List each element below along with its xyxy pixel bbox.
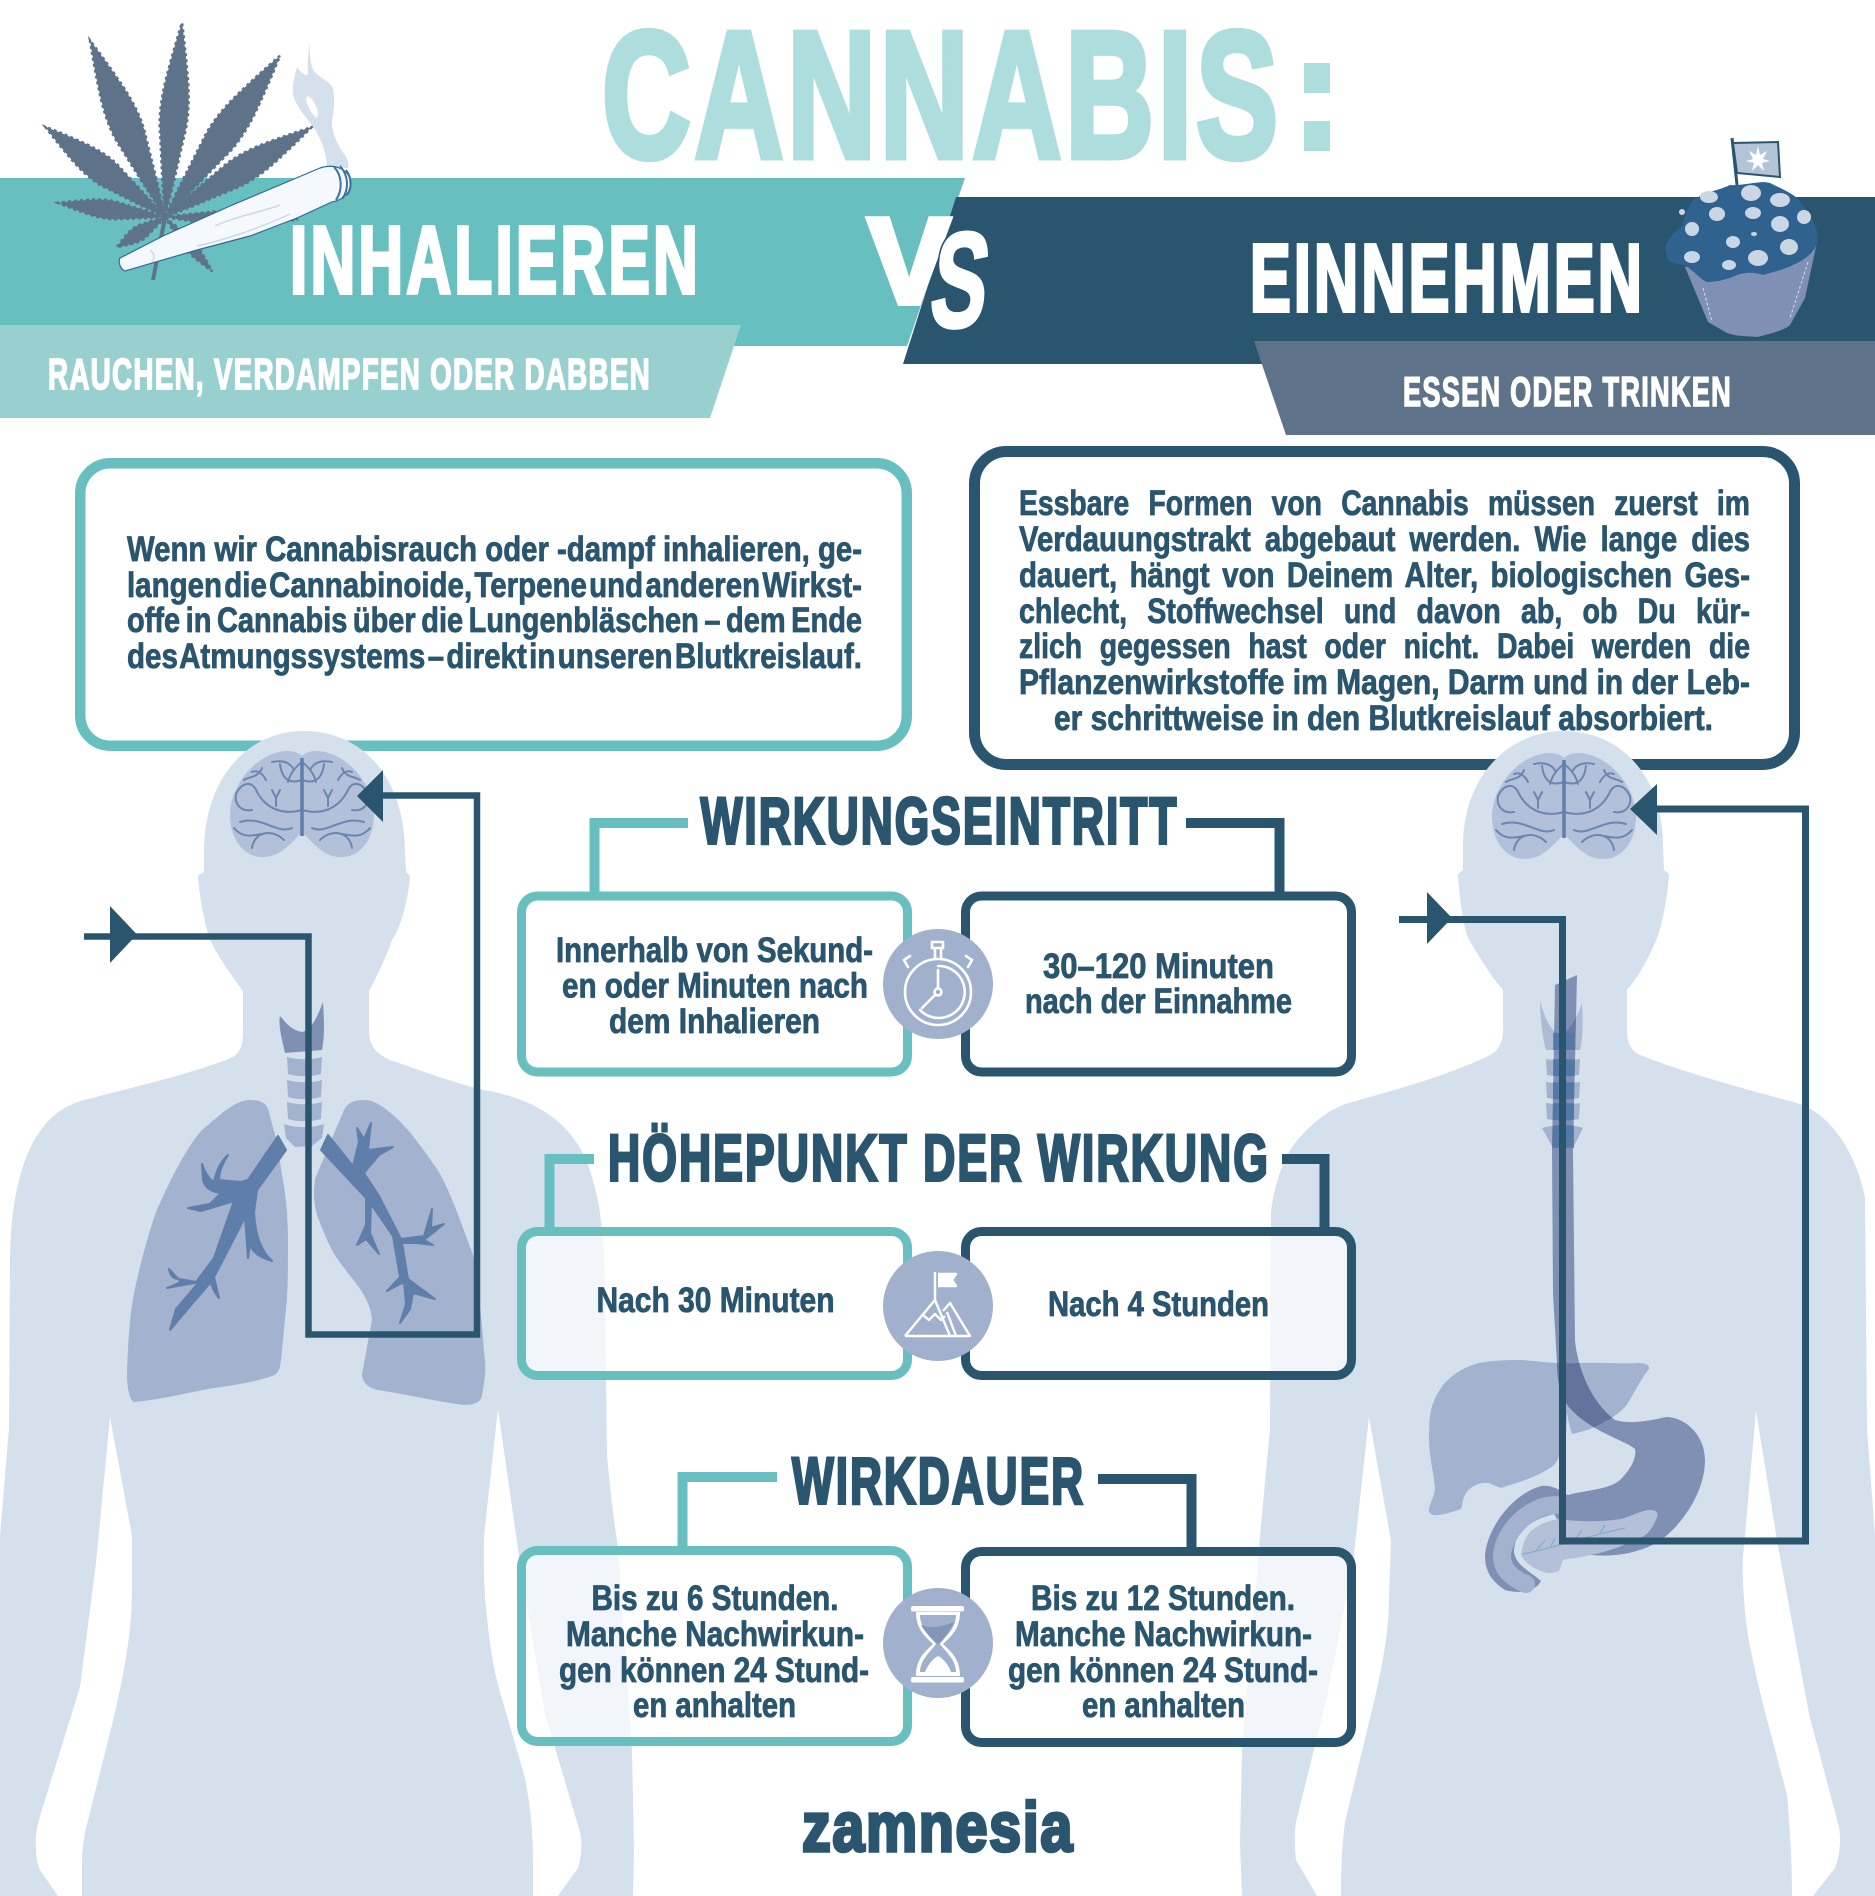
icon: muffin [1665, 138, 1817, 337]
versus label: V [868, 193, 950, 329]
panel: höhepunkt inhalieren [522, 1232, 908, 1376]
arrow: left figure to lungs and brain [84, 770, 477, 1334]
panel: höhepunkt einnehmen: Nach 4 Stunden [1048, 1285, 1269, 1324]
icon: smoke [293, 43, 348, 168]
heading: wirkungseintritt [594, 784, 1280, 896]
versus label: S [923, 203, 998, 356]
text: einnehmen description: er schrittweise in den Blutkreislauf absorbiert. [1054, 699, 1713, 738]
panel: wirkdauer einnehmen [966, 1552, 1352, 1742]
title: CANNABIS [602, 0, 1282, 196]
heading: höhepunkt der wirkung [550, 1122, 1324, 1231]
text: inhalieren description: offe in Cannabis über die Lungenbläschen – dem Ende [127, 601, 862, 640]
text: inhalieren description: langen die Cannabinoide, Terpene und anderen Wirkst- [127, 566, 862, 605]
text: einnehmen description: Verdauungstrakt abgebaut werden. Wie lange dies [1019, 520, 1750, 559]
icon: joint [119, 166, 351, 271]
text: inhalieren description: des Atmungssystems – direkt in unseren Blutkreislauf. [127, 637, 862, 676]
organ: liver [1429, 1360, 1649, 1515]
panel: höhepunkt inhalieren: Nach 30 Minuten [596, 1281, 834, 1320]
organ: esophagus and stomach [1485, 975, 1705, 1592]
text: inhalieren description [127, 530, 862, 676]
versus label [868, 193, 998, 356]
panel: inhalieren description [80, 463, 907, 746]
organ: left trachea [279, 1002, 324, 1147]
organ: left lung [127, 1100, 288, 1402]
icon: left brain [230, 751, 374, 857]
panel: wirkungseintritt inhalieren [522, 896, 908, 1072]
panel: höhepunkt einnehmen [966, 1232, 1352, 1376]
panel: wirkdauer einnehmen: en anhalten [1082, 1686, 1245, 1725]
text: einnehmen description: dauert, hängt von Deinem Alter, biologischen Ges- [1019, 556, 1750, 595]
figure: left body silhouette [0, 731, 634, 1896]
panel: wirkdauer inhalieren: Bis zu 6 Stunden. [592, 1579, 838, 1618]
panel: wirkdauer einnehmen: gen können 24 Stund- [1008, 1651, 1318, 1690]
panel: wirkungseintritt inhalieren: Innerhalb von Sekund- [556, 931, 873, 970]
panel: wirkdauer inhalieren: gen können 24 Stund- [559, 1651, 869, 1690]
figure: right body silhouette [1240, 731, 1875, 1896]
panel: wirkungseintritt einnehmen: 30–120 Minuten [1043, 947, 1274, 986]
banner: einnehmen [903, 197, 1875, 435]
icon: stopwatch [883, 929, 993, 1039]
icon: right brain [1492, 753, 1636, 859]
panel: wirkungseintritt inhalieren: en oder Minuten nach [562, 966, 868, 1006]
panel: wirkdauer inhalieren: Manche Nachwirkun- [566, 1615, 864, 1654]
heading: einnehmen: EINNEHMEN [1250, 225, 1645, 332]
text: einnehmen description [1019, 484, 1750, 738]
heading: wirkdauer: WIRKDAUER [792, 1444, 1085, 1518]
panel: wirkungseintritt einnehmen: nach der Einnahme [1025, 982, 1292, 1021]
icon: mountain with flag [883, 1251, 993, 1361]
heading: höhepunkt der wirkung: HÖHEPUNKT DER WIRKUNG [608, 1122, 1270, 1194]
panel: wirkdauer einnehmen: Manche Nachwirkun- [1015, 1615, 1312, 1654]
arrow: right figure to stomach and brain [1399, 784, 1806, 1541]
heading: wirkungseintritt: WIRKUNGSEINTRITT [700, 784, 1178, 858]
text: inhalieren description: Wenn wir Cannabisrauch oder -dampf inhalieren, ge- [127, 530, 862, 569]
logo: zamnesia: zamnesia [802, 1788, 1074, 1866]
icon: cannabis leaf [37, 22, 319, 280]
versus label: S [923, 203, 998, 356]
organ: right trachea [1540, 1001, 1583, 1148]
organ: esophagus over trachea overlap [1553, 1033, 1574, 1148]
banner: inhalieren [0, 178, 965, 418]
heading: wirkdauer [682, 1444, 1192, 1551]
panel: einnehmen description [974, 452, 1794, 764]
panel: wirkungseintritt inhalieren: dem Inhalieren [609, 1002, 820, 1041]
panel: wirkungseintritt einnehmen [966, 896, 1352, 1072]
heading: inhalieren: INHALIEREN [290, 207, 701, 314]
icon: hourglass [883, 1588, 993, 1698]
panel: wirkdauer inhalieren: en anhalten [633, 1686, 796, 1725]
panel: wirkdauer einnehmen: Bis zu 12 Stunden. [1031, 1579, 1295, 1618]
text: einnehmen description: Pflanzenwirkstoffe im Magen, Darm und in der Leb- [1019, 663, 1750, 702]
panel: wirkdauer inhalieren [522, 1550, 908, 1742]
organ: right lung [314, 1100, 485, 1405]
organ: pancreas [1502, 1505, 1658, 1584]
subheading: rauchen: RAUCHEN, VERDAMPFEN ODER DABBEN [48, 350, 651, 399]
